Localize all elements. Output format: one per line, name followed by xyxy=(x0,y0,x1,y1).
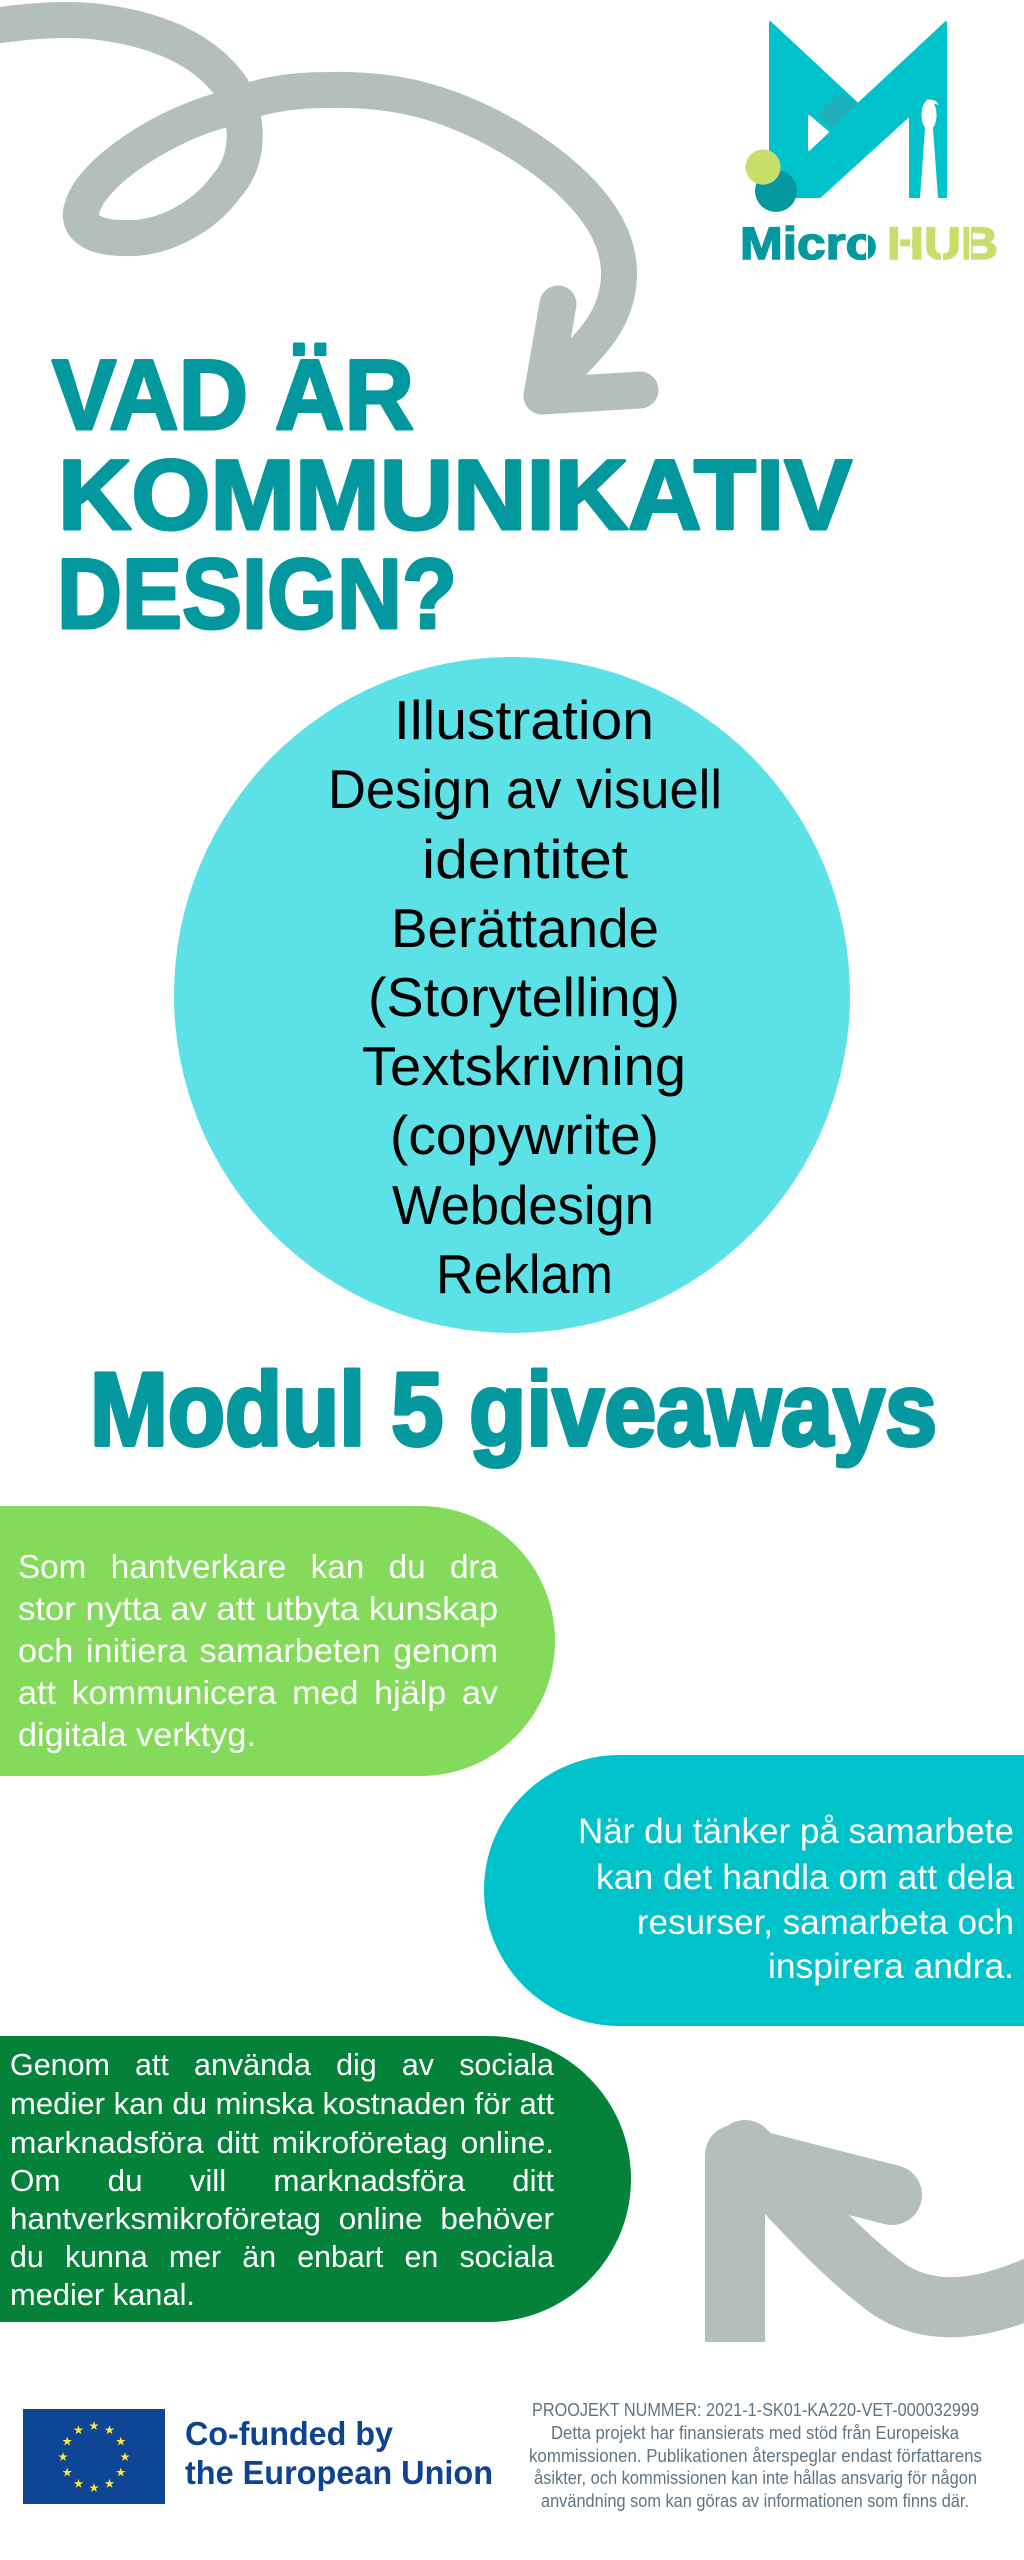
callout text: dark green: marknadsföra ditt mikroföretag online. xyxy=(10,2125,554,2160)
callout text: teal: När du tänker på samarbete xyxy=(578,1812,1014,1851)
logo wordmark: Micro: Micro xyxy=(740,218,877,269)
logo: MicroHUB xyxy=(740,22,998,269)
panel: dark green callout xyxy=(0,2036,631,2322)
heading: Modul 5 giveaways: Modul 5 giveaways xyxy=(90,1352,937,1468)
callout text: teal: inspirera andra. xyxy=(768,1947,1014,1986)
callout text: green: digitala verktyg. xyxy=(18,1716,256,1753)
panel: light green callout xyxy=(0,1506,555,1776)
list of disciplines: Design av visuell xyxy=(328,758,722,820)
callout text: dark green: medier kanal. xyxy=(10,2277,195,2312)
panel: circle with list of design disciplines xyxy=(174,657,850,1333)
project disclaimer text: användning som kan göras av informationen som finns där. xyxy=(541,2490,969,2511)
project disclaimer text xyxy=(529,2399,982,2511)
arrow: grey arrow bottom right pointing up xyxy=(735,2150,1024,2370)
callout text: teal xyxy=(578,1812,1015,1986)
callout text: dark green: hantverksmikroföretag online behöver xyxy=(10,2201,554,2236)
callout text: green: stor nytta av att utbyta kunskap xyxy=(18,1590,498,1627)
callout text: teal: resurser, samarbeta och xyxy=(637,1903,1014,1942)
callout text: dark green: Om du vill marknadsföra ditt xyxy=(10,2163,554,2198)
logo mark: paint brush xyxy=(920,100,939,198)
arrow: curly grey arrow pointing to title xyxy=(0,20,640,396)
title: KOMMUNIKATIV xyxy=(58,439,852,550)
logo wordmark: HUB: HUB xyxy=(887,218,998,269)
list of disciplines: (Storytelling) xyxy=(368,966,680,1028)
callout text: green xyxy=(18,1548,499,1753)
list of disciplines: Webdesign xyxy=(392,1174,654,1236)
callout text: teal: kan det handla om att dela xyxy=(596,1858,1015,1897)
list of disciplines: Illustration xyxy=(394,689,654,751)
list of disciplines: Textskrivning xyxy=(362,1035,686,1097)
list of disciplines: identitet xyxy=(422,828,628,890)
callout text: dark green: medier kan du minska kostnaden för att xyxy=(10,2086,554,2121)
EU flag xyxy=(23,2409,165,2504)
callout text: dark green xyxy=(10,2047,555,2312)
list of disciplines: Reklam xyxy=(436,1243,613,1305)
panel: teal callout xyxy=(484,1755,1024,2026)
logo mark: white triangle xyxy=(809,116,828,150)
co-funding statement: the European Union xyxy=(185,2454,493,2491)
project disclaimer text: Detta projekt har finansierats med stöd från Europeiska xyxy=(551,2422,960,2443)
logo mark: teal circle xyxy=(755,170,797,212)
list of disciplines: (copywrite) xyxy=(390,1104,659,1166)
logo mark: lime circle xyxy=(745,149,781,185)
logo mark: dark band xyxy=(818,92,857,129)
project disclaimer text: kommissionen. Publikationen återspeglar endast författarens xyxy=(529,2445,982,2466)
callout text: green: att kommunicera med hjälp av xyxy=(18,1674,499,1711)
callout text: dark green: Genom att använda dig av sociala xyxy=(10,2047,555,2082)
list of disciplines xyxy=(328,689,722,1305)
callout text: dark green: du kunna mer än enbart en sociala xyxy=(10,2239,555,2274)
co-funding statement xyxy=(185,2415,493,2491)
logo mark: letter M xyxy=(770,22,946,197)
title: DESIGN? xyxy=(57,538,457,649)
co-funding statement: Co-funded by xyxy=(185,2415,394,2452)
list of disciplines: Berättande xyxy=(391,897,659,959)
title: VAD ÄR xyxy=(52,339,414,450)
callout text: green: Som hantverkare kan du dra xyxy=(18,1548,499,1585)
callout text: green: och initiera samarbeten genom xyxy=(18,1632,498,1669)
title xyxy=(52,339,852,649)
project disclaimer text: åsikter, och kommissionen kan inte hållas ansvarig för någon xyxy=(534,2467,977,2488)
